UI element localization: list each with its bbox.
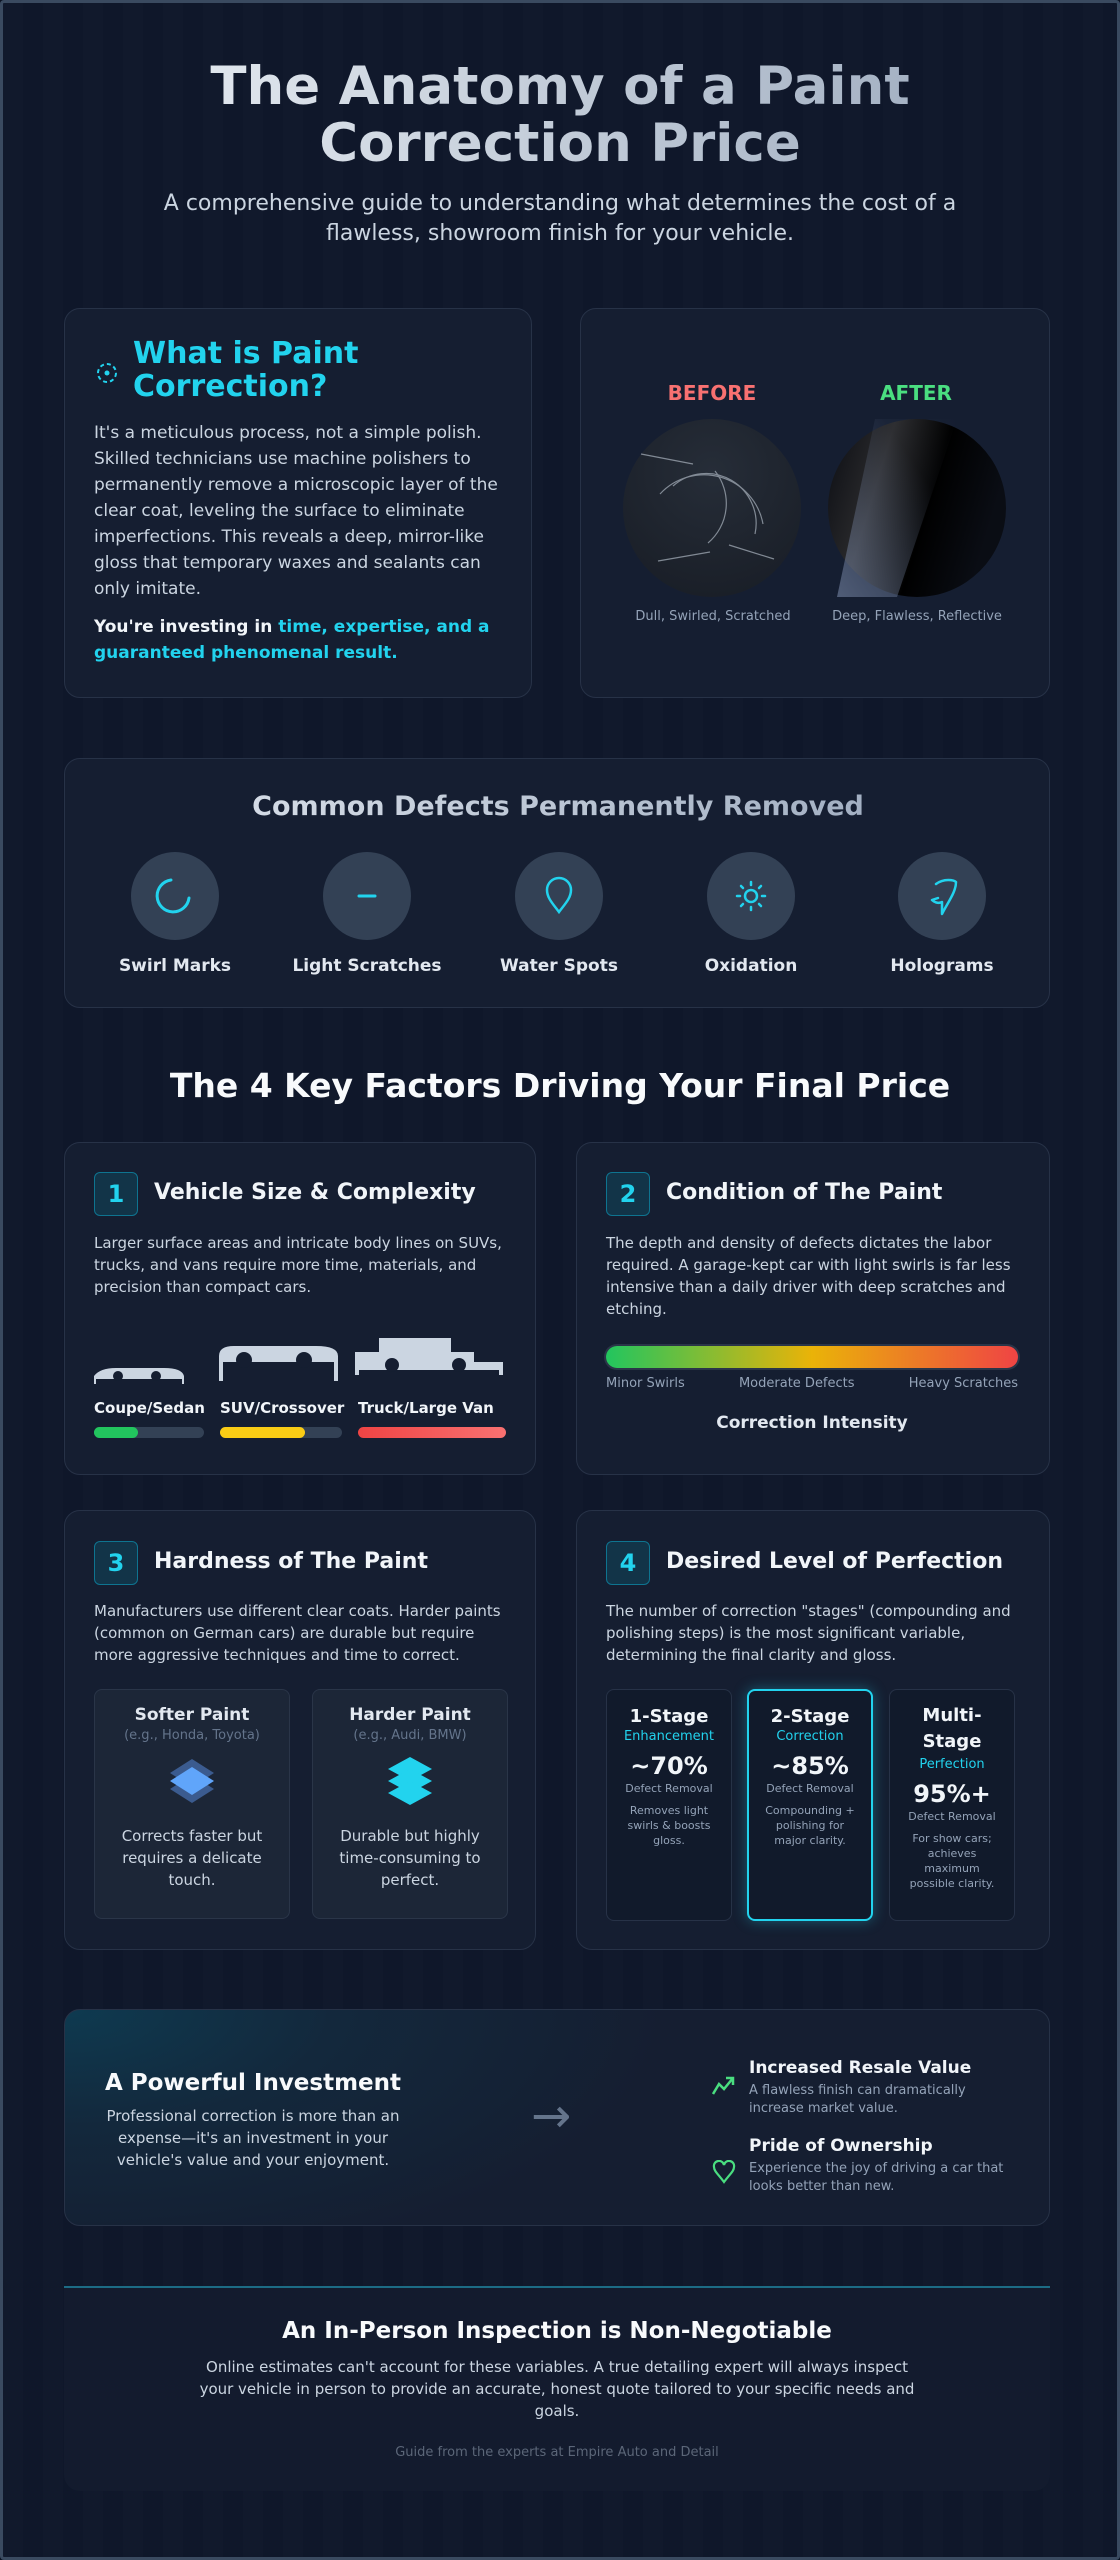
heading: Correction?: [133, 369, 327, 404]
stage card 1: Enhancement: [624, 1729, 714, 1744]
panel: in-person inspection: [64, 2286, 1050, 2491]
defect: oxidation: Oxidation: [705, 956, 797, 976]
defect: oxidation: [705, 852, 797, 976]
text block: It's a meticulous process, not a simple polish. Skilled technicians use machine polishers to permanently remove a microscopic layer of the clear coat, leveling the surface to eliminate imperfections. This reveals a deep, mirror-like gloss that temporary waxes and sealants can only imitate.: [94, 423, 498, 599]
defect: swirl marks: [119, 852, 231, 976]
badge 2: 2: [620, 1180, 636, 1208]
benefit: resale value: A flawless finish can dramatically increase market value.: [749, 2083, 966, 2116]
stage card 1: [606, 1689, 732, 1921]
caption before: Dull, Swirled, Scratched: [635, 609, 791, 624]
stage card 2 highlighted: [747, 1689, 873, 1921]
after label: AFTER: [880, 381, 952, 405]
card: harder paint: Harder Paint: [349, 1705, 471, 1725]
bar labels: Minor Swirls: [606, 1376, 685, 1391]
title: [0, 58, 1120, 172]
bar coupe: [94, 1427, 204, 1438]
stage card 2 highlighted: 2-Stage: [771, 1706, 849, 1727]
label coupe: Coupe/Sedan: [94, 1399, 205, 1417]
stage card 3: Multi-: [922, 1705, 982, 1726]
text block: The number of correction "stages" (compounding and polishing steps) is the most significant variable, determining the final clarity and gloss.: [606, 1602, 1011, 1664]
heading: An In-Person Inspection is Non-Negotiable: [282, 2318, 832, 2344]
stage card 2 highlighted: ~85%: [771, 1752, 849, 1780]
defect: water spots: [500, 852, 618, 976]
badge 3: [94, 1541, 138, 1585]
bar labels: Moderate Defects: [739, 1376, 855, 1391]
defect: holograms: Holograms: [890, 956, 994, 976]
after circle: [828, 419, 1006, 597]
before circle: [624, 419, 800, 597]
benefit: pride: Experience the joy of driving a car that looks better than new.: [749, 2161, 1003, 2194]
panel: factor 1 vehicle size: [64, 1142, 536, 1475]
stage card 3: Perfection: [919, 1757, 985, 1772]
caption after: Deep, Flawless, Reflective: [832, 609, 1002, 624]
benefit: resale value: Increased Resale Value: [749, 2058, 971, 2078]
heading: [65, 791, 1051, 822]
panel: what is paint correction: [64, 308, 532, 698]
label suv: SUV/Crossover: [220, 1399, 344, 1417]
panel: factor 4 perfection: [576, 1510, 1050, 1950]
text block: Online estimates can't account for these variables. A true detailing expert will always inspect your vehicle in person to provide an accurate, honest quote tailored to your specific needs and goals.: [200, 2358, 914, 2420]
icon: trend up: [712, 2076, 734, 2095]
stage card 3: 95%+: [913, 1780, 991, 1808]
benefit: pride: Pride of Ownership: [749, 2136, 933, 2156]
section heading: 4 key factors: The 4 Key Factors Driving Your Final Price: [170, 1066, 950, 1105]
icon: heart: [712, 2160, 736, 2184]
stage card 3: For show cars; achieves maximum possible clarity.: [910, 1832, 994, 1890]
benefit: pride: [712, 2136, 1004, 2194]
vehicle icons: [94, 1338, 503, 1384]
stage card 3: Defect Removal: [908, 1810, 996, 1823]
heading: Vehicle Size & Complexity: [154, 1180, 476, 1205]
bar labels: [606, 1376, 1018, 1391]
before label: BEFORE: [668, 381, 756, 405]
panel: powerful investment: [64, 2009, 1050, 2226]
stage card 3: [889, 1689, 1015, 1921]
defect: light scratches: [292, 852, 442, 976]
gradient intensity bar: [606, 1346, 1018, 1368]
defect: water spots: Water Spots: [500, 956, 618, 976]
card: softer paint: (e.g., Honda, Toyota): [124, 1728, 260, 1743]
icon: soft layers: [170, 1759, 214, 1803]
heading: What is Paint: [133, 336, 358, 371]
title: Correction Price: [319, 113, 801, 174]
panel: factor 3 hardness: [64, 1510, 536, 1950]
text block: Manufacturers use different clear coats. Harder paints (common on German cars) are durable but require more aggressive techniques and time to correct.: [94, 1602, 501, 1664]
card: softer paint: Corrects faster but requires a delicate touch.: [122, 1827, 262, 1889]
arrow: →: [531, 2088, 571, 2144]
defect: holograms: [890, 852, 994, 976]
stage card 3: Stage: [923, 1731, 981, 1752]
defect: swirl marks: Swirl Marks: [119, 956, 231, 976]
stage card 2 highlighted: Defect Removal: [766, 1782, 854, 1795]
icon: dashed target: [97, 363, 117, 383]
stage card 1: ~70%: [630, 1752, 708, 1780]
caption: Correction Intensity: [716, 1413, 908, 1433]
badge 4: 4: [620, 1549, 636, 1577]
badge 1: 1: [108, 1180, 124, 1208]
stage card 1: 1-Stage: [630, 1706, 708, 1727]
card: harder paint: Durable but highly time-consuming to perfect.: [339, 1827, 481, 1889]
icon: hard layers: [388, 1757, 432, 1805]
heading: [133, 336, 358, 404]
badge 3: 3: [108, 1549, 124, 1577]
heading: Common Defects Permanently Removed: [252, 791, 864, 822]
text block: Larger surface areas and intricate body lines on SUVs, trucks, and vans require more time, materials, and precision than compact cars.: [94, 1234, 502, 1296]
footer credit: Guide from the experts at Empire Auto and Detail: [395, 2445, 719, 2460]
heading: Desired Level of Perfection: [666, 1549, 1003, 1574]
subtitle: A comprehensive guide to understanding what determines the cost of a flawless, showroom finish for your vehicle.: [164, 191, 956, 246]
badge 1: [94, 1172, 138, 1216]
bar truck: [358, 1427, 506, 1438]
defect: light scratches: Light Scratches: [292, 956, 442, 976]
text block: The depth and density of defects dictates the labor required. A garage-kept car with light swirls is far less intensive than a daily driver with deep scratches and etching.: [606, 1234, 1011, 1318]
badge 4: [606, 1541, 650, 1585]
text block: Professional correction is more than an expense—it's an investment in your vehicle's value and your enjoyment.: [106, 2107, 399, 2169]
heading: Hardness of The Paint: [154, 1549, 428, 1574]
stage card 2 highlighted: Correction: [776, 1729, 844, 1744]
title: The Anatomy of a Paint: [210, 56, 910, 117]
card: softer paint: Softer Paint: [135, 1705, 249, 1725]
card: harder paint: (e.g., Audi, BMW): [353, 1728, 467, 1743]
stage card 1: Defect Removal: [625, 1782, 713, 1795]
heading: Condition of The Paint: [666, 1180, 942, 1205]
stage card 2 highlighted: Compounding + polishing for major clarity.: [765, 1804, 855, 1847]
panel: factor 2 condition: [576, 1142, 1050, 1475]
label truck: Truck/Large Van: [358, 1399, 494, 1417]
panel: common defects: [64, 758, 1050, 1008]
bar labels: Heavy Scratches: [909, 1376, 1018, 1391]
benefit: resale value: [712, 2058, 971, 2116]
stage card 1: Removes light swirls & boosts gloss.: [628, 1804, 710, 1847]
bar suv: [220, 1427, 342, 1438]
card: softer paint: [94, 1689, 290, 1919]
heading: A Powerful Investment: [105, 2070, 401, 2096]
panel: before/after: [580, 308, 1050, 698]
badge 2: [606, 1172, 650, 1216]
callout text: You're investing in time, expertise, and a guaranteed phenomenal result.: [94, 617, 490, 663]
card: harder paint: [312, 1689, 508, 1919]
